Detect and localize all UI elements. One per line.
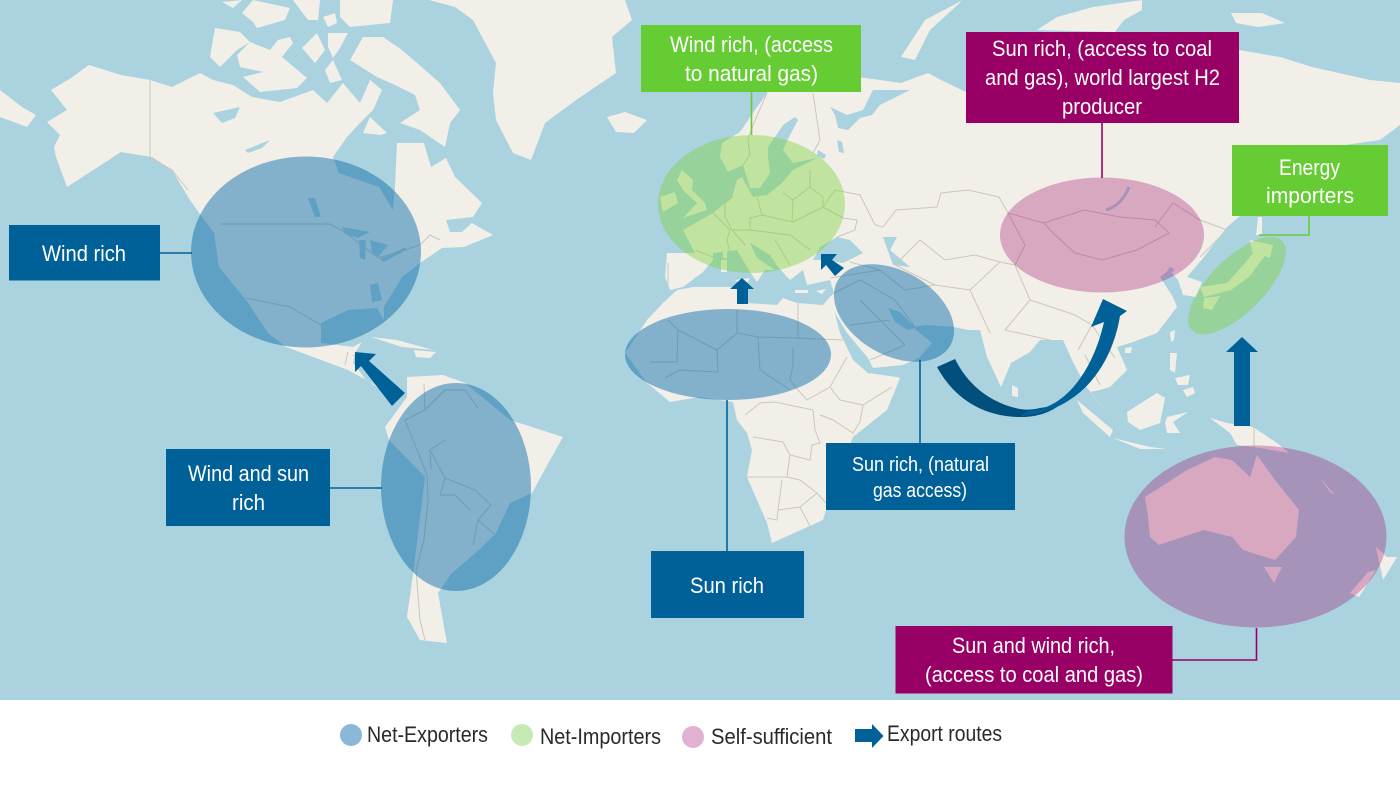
legend: Export routes: Export routes [887,721,1002,746]
label: Sun and wind rich, access to coal and gas: (access to coal and gas) [925,662,1143,687]
label: Sun and wind rich, access to coal and gas [896,626,1172,694]
connector lines [160,92,1309,660]
label: Sun rich, world largest H2 producer: Sun rich, (access to coal [992,36,1212,61]
legend: Export routes [855,721,1002,748]
label: Sun and wind rich, access to coal and gas: Sun and wind rich, [952,633,1115,658]
region: Net-exporters South America [381,383,531,591]
label: Wind and sun rich: rich [232,490,265,515]
legend [340,721,1002,749]
legend: Net-Importers: Net-Importers [540,724,661,749]
label: Sun rich, natural gas access [826,443,1015,510]
label: Wind rich, access to natural gas: to natural gas) [685,61,818,86]
arrow: North Africa to Europe [730,278,754,304]
region: Net-exporters Middle East [817,244,971,382]
label: Sun rich: Sun rich [690,573,764,598]
arrow: Australia to Japan [1226,337,1258,426]
label: Wind rich, access to natural gas: Wind rich, (access [670,32,833,57]
region: Net-importers Japan [1173,222,1301,349]
legend: Self-sufficient: Self-sufficient [711,724,832,749]
legend: Net-Exporters: Net-Exporters [367,722,488,747]
label: Energy importers: Energy [1279,155,1340,180]
label: Wind rich: Wind rich [42,241,126,266]
region: Self-sufficient Australia [1124,446,1386,628]
region: Net-exporters North America [191,156,421,348]
label: Sun rich, natural gas access: Sun rich, (natural [852,454,989,476]
label: Wind and sun rich [166,449,330,526]
label: Sun rich, world largest H2 producer [966,32,1239,123]
region: Net-importers Europe [658,135,845,273]
label: Wind and sun rich: Wind and sun [188,461,309,486]
label: Wind rich, access to natural gas [641,25,861,92]
label: Sun rich, world largest H2 producer: producer [1062,94,1142,119]
arrow: Middle East to China curved [937,299,1127,417]
label: Sun rich [651,551,804,618]
label: Energy importers: importers [1266,183,1354,208]
arrow: Middle East to Europe [821,254,844,276]
label: Wind rich [9,225,160,280]
label: Sun rich, natural gas access: gas access) [873,480,967,502]
arrow: South America to North America [355,352,405,406]
region: Net-exporters North Africa [625,309,831,400]
region: Self-sufficient China [1000,178,1204,292]
label: Sun rich, world largest H2 producer: and gas), world largest H2 [985,65,1220,90]
label: Energy importers [1232,145,1388,216]
